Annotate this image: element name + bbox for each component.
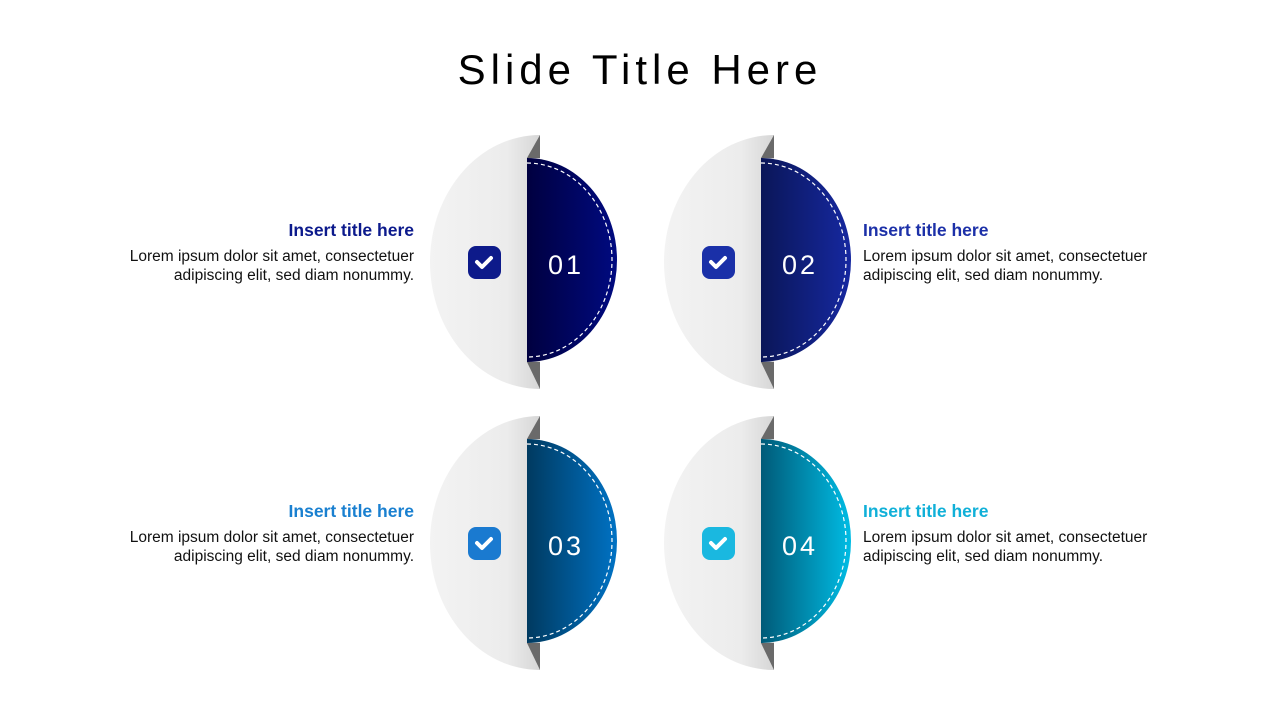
icon: check 01 (468, 246, 501, 279)
text 04: Insert title here (863, 501, 988, 521)
text 03 (130, 501, 414, 565)
item 04 graphic: 04 (782, 531, 818, 561)
item 03 graphic: 03 (548, 531, 584, 561)
text 01 (130, 220, 414, 284)
text 03: Insert title here (289, 501, 414, 521)
text 01: Lorem ipsum dolor sit amet, consectetuer adipiscing elit, sed diam nonummy. (130, 248, 414, 284)
item 04 graphic (664, 416, 851, 670)
text 04 (863, 501, 1148, 565)
icon: check 04 (702, 527, 735, 560)
item 02 graphic: 02 (782, 250, 818, 280)
item 01 graphic: 01 (548, 250, 584, 280)
text 01: Insert title here (289, 220, 414, 240)
text 02: Insert title here (863, 220, 988, 240)
text 03: Lorem ipsum dolor sit amet, consectetuer adipiscing elit, sed diam nonummy. (130, 529, 414, 565)
icon: check 02 (702, 246, 735, 279)
text 02 (863, 220, 1148, 284)
item 03 graphic (430, 416, 617, 670)
item 01 graphic (430, 135, 617, 389)
item 02 graphic (664, 135, 851, 389)
icon: check 03 (468, 527, 501, 560)
text 04: Lorem ipsum dolor sit amet, consectetuer adipiscing elit, sed diam nonummy. (863, 529, 1147, 565)
text 02: Lorem ipsum dolor sit amet, consectetuer adipiscing elit, sed diam nonummy. (863, 248, 1147, 284)
title: Slide Title Here (458, 46, 822, 93)
